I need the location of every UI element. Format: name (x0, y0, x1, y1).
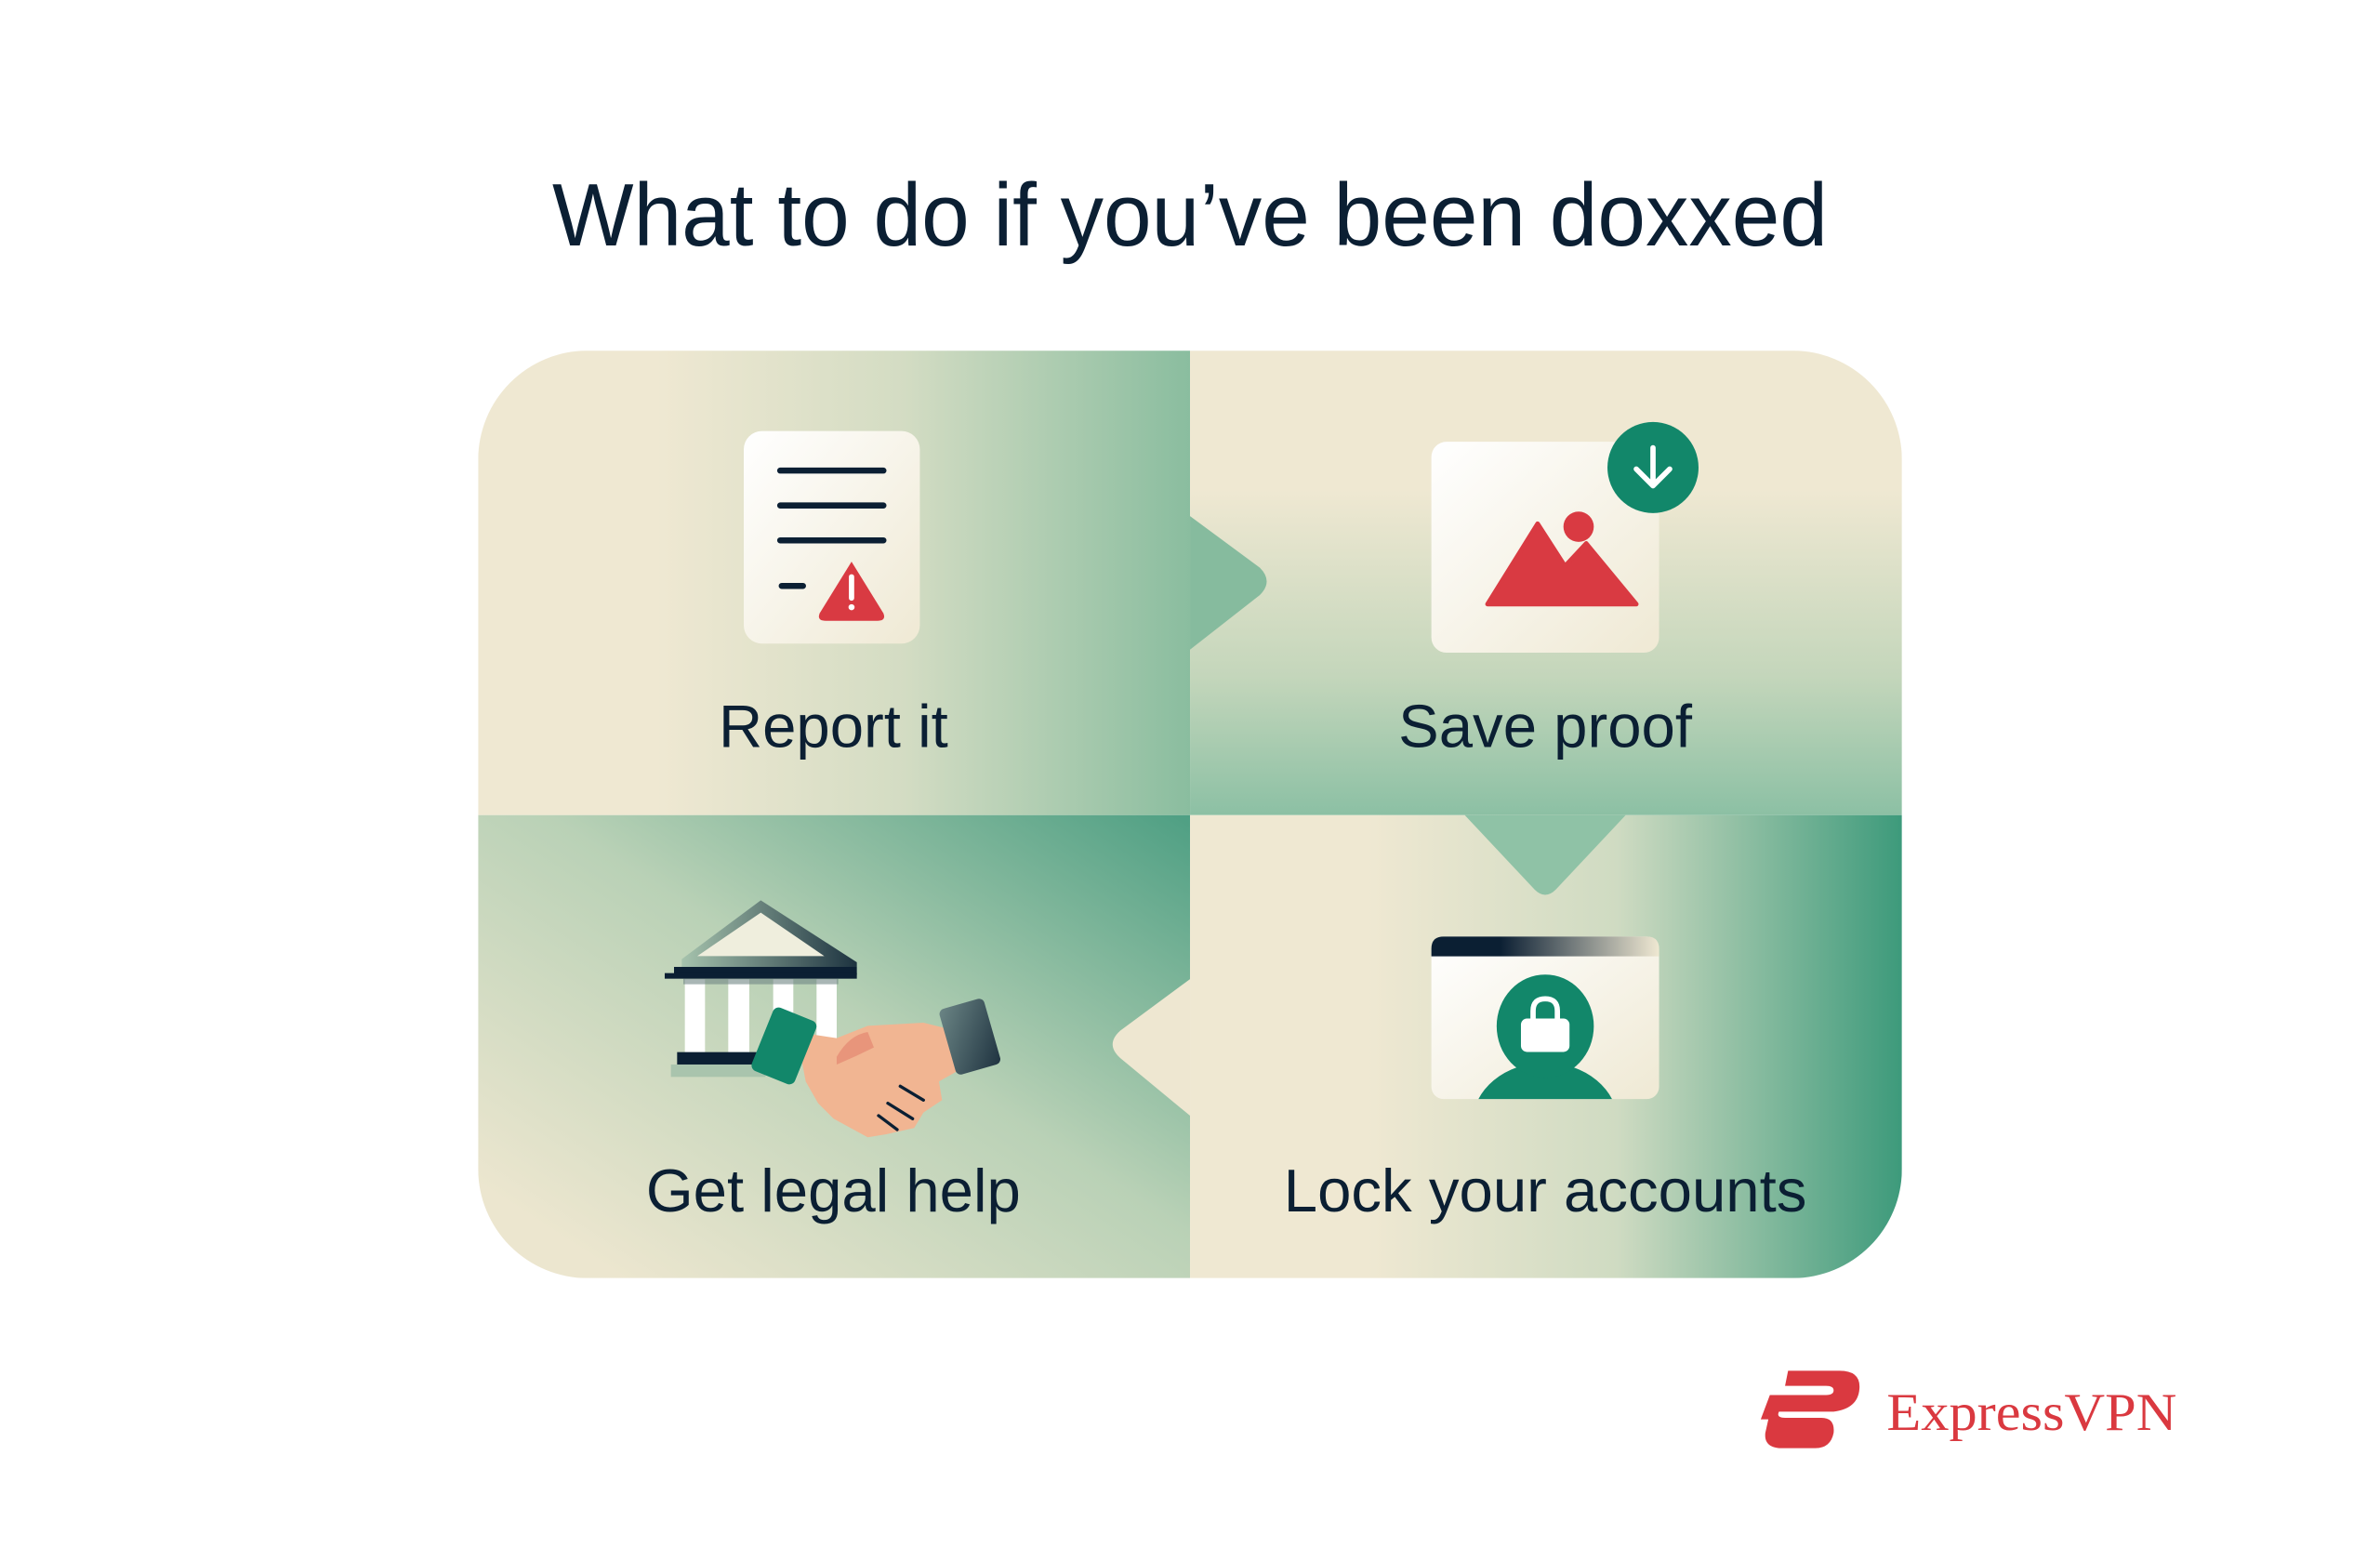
arrow: save proof to lock accounts (1465, 815, 1626, 894)
icon: locked account (1432, 936, 1659, 1099)
text: report it: Report it (719, 692, 948, 760)
panel: get legal help quadrant (478, 815, 1190, 1278)
text: get legal help: Get legal help (646, 1157, 1021, 1224)
panel: lock accounts quadrant (1190, 815, 1902, 1278)
panel: save proof quadrant (1190, 351, 1902, 815)
icon: report document (744, 431, 919, 643)
arrow: lock accounts to legal help (1113, 979, 1190, 1116)
text: save proof: Save proof (1398, 692, 1693, 760)
logo: ExpressVPN: ExpressVPN (1886, 1383, 2176, 1442)
icon: bank and handshake (665, 900, 1001, 1137)
panel: steps grid (478, 351, 2176, 1449)
icon: saved image (1432, 422, 1699, 653)
panel: report it quadrant (478, 351, 1190, 815)
arrow: report to save proof (1190, 516, 1266, 650)
text: lock your accounts: Lock your accounts (1284, 1157, 1806, 1224)
logo: ExpressVPN (1761, 1370, 2176, 1449)
title: What to do if you’ve been doxxed (552, 165, 1828, 265)
